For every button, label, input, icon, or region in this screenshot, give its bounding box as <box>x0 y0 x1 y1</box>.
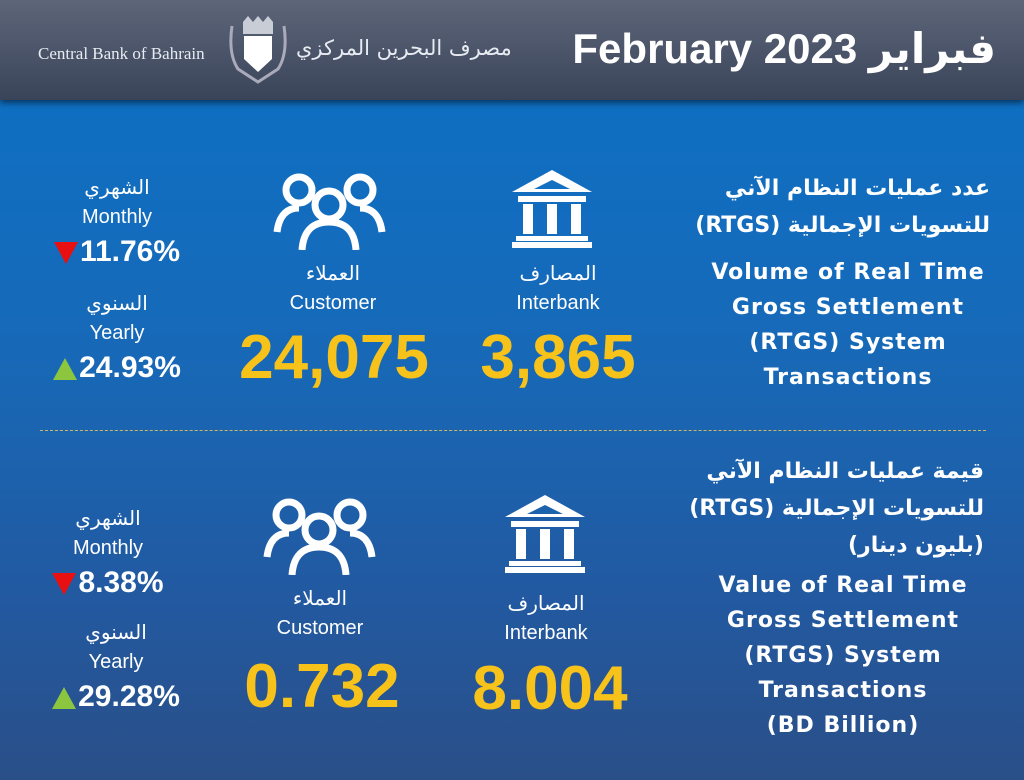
customers label <box>290 261 376 314</box>
customers label <box>277 586 363 639</box>
arabic heading: عدد عمليات النظام الآني <box>725 176 990 201</box>
arabic heading: قيمة عمليات النظام الآني <box>706 459 984 484</box>
english heading <box>718 573 968 738</box>
icon: bank <box>505 495 585 573</box>
interbank label: المصارف <box>507 591 585 615</box>
yearly change: 29.28% <box>78 680 180 713</box>
customers label: العملاء <box>306 261 360 285</box>
english heading: Transactions <box>764 365 932 390</box>
interbank label <box>516 261 600 314</box>
monthly change <box>52 506 164 599</box>
customers value: 0.732 <box>244 652 400 721</box>
interbank label: المصارف <box>519 261 597 285</box>
yearly change: السنوي <box>85 620 147 644</box>
icon: customers <box>274 174 386 250</box>
customers value: 24,075 <box>239 323 429 392</box>
interbank label <box>504 591 588 644</box>
english heading: Volume of Real Time <box>711 260 985 285</box>
interbank value: 3,865 <box>480 323 636 392</box>
english heading: Gross Settlement <box>727 608 959 633</box>
customers label: العملاء <box>293 586 347 610</box>
icon: emblem <box>229 16 287 84</box>
interbank value: 8.004 <box>472 654 628 723</box>
english heading <box>711 260 985 390</box>
customers label: Customer <box>277 617 363 639</box>
monthly change: الشهري <box>75 506 141 530</box>
english heading: Value of Real Time <box>718 573 968 598</box>
english heading: Gross Settlement <box>732 295 964 320</box>
interbank label: Interbank <box>504 622 588 644</box>
yearly change: Yearly <box>89 651 143 673</box>
english heading: Transactions <box>759 678 927 703</box>
english heading: (BD Billion) <box>767 713 919 738</box>
arabic heading: للتسويات الإجمالية (RTGS) <box>689 496 984 521</box>
monthly change: Monthly <box>82 206 152 228</box>
arabic heading: (بليون دينار) <box>848 533 984 558</box>
icon: bank <box>512 170 592 248</box>
panel: value <box>52 458 984 738</box>
english heading: (RTGS) System <box>744 643 942 668</box>
monthly change: Monthly <box>73 537 143 559</box>
customers label: Customer <box>290 292 376 314</box>
english heading: (RTGS) System <box>749 330 947 355</box>
yearly change: Yearly <box>90 322 144 344</box>
yearly change <box>53 291 181 384</box>
logo text: Central Bank of Bahrain <box>38 44 205 63</box>
divider <box>40 430 986 431</box>
yearly change: 24.93% <box>79 351 181 384</box>
arabic heading: للتسويات الإجمالية (RTGS) <box>695 213 990 238</box>
monthly change: 11.76% <box>80 235 180 268</box>
arabic heading <box>689 458 984 558</box>
panel: volume <box>53 170 990 392</box>
monthly change: الشهري <box>84 175 150 199</box>
monthly change: 8.38% <box>78 566 164 599</box>
title: February 2023 فبراير <box>572 25 996 72</box>
yearly change <box>52 620 180 713</box>
header bar <box>0 0 1024 100</box>
icon: customers <box>264 498 376 575</box>
yearly change: السنوي <box>86 291 148 315</box>
interbank label: Interbank <box>516 292 600 314</box>
monthly change <box>54 175 180 268</box>
arabic heading <box>695 176 990 238</box>
logo arabic: مصرف البحرين المركزي <box>296 36 512 60</box>
